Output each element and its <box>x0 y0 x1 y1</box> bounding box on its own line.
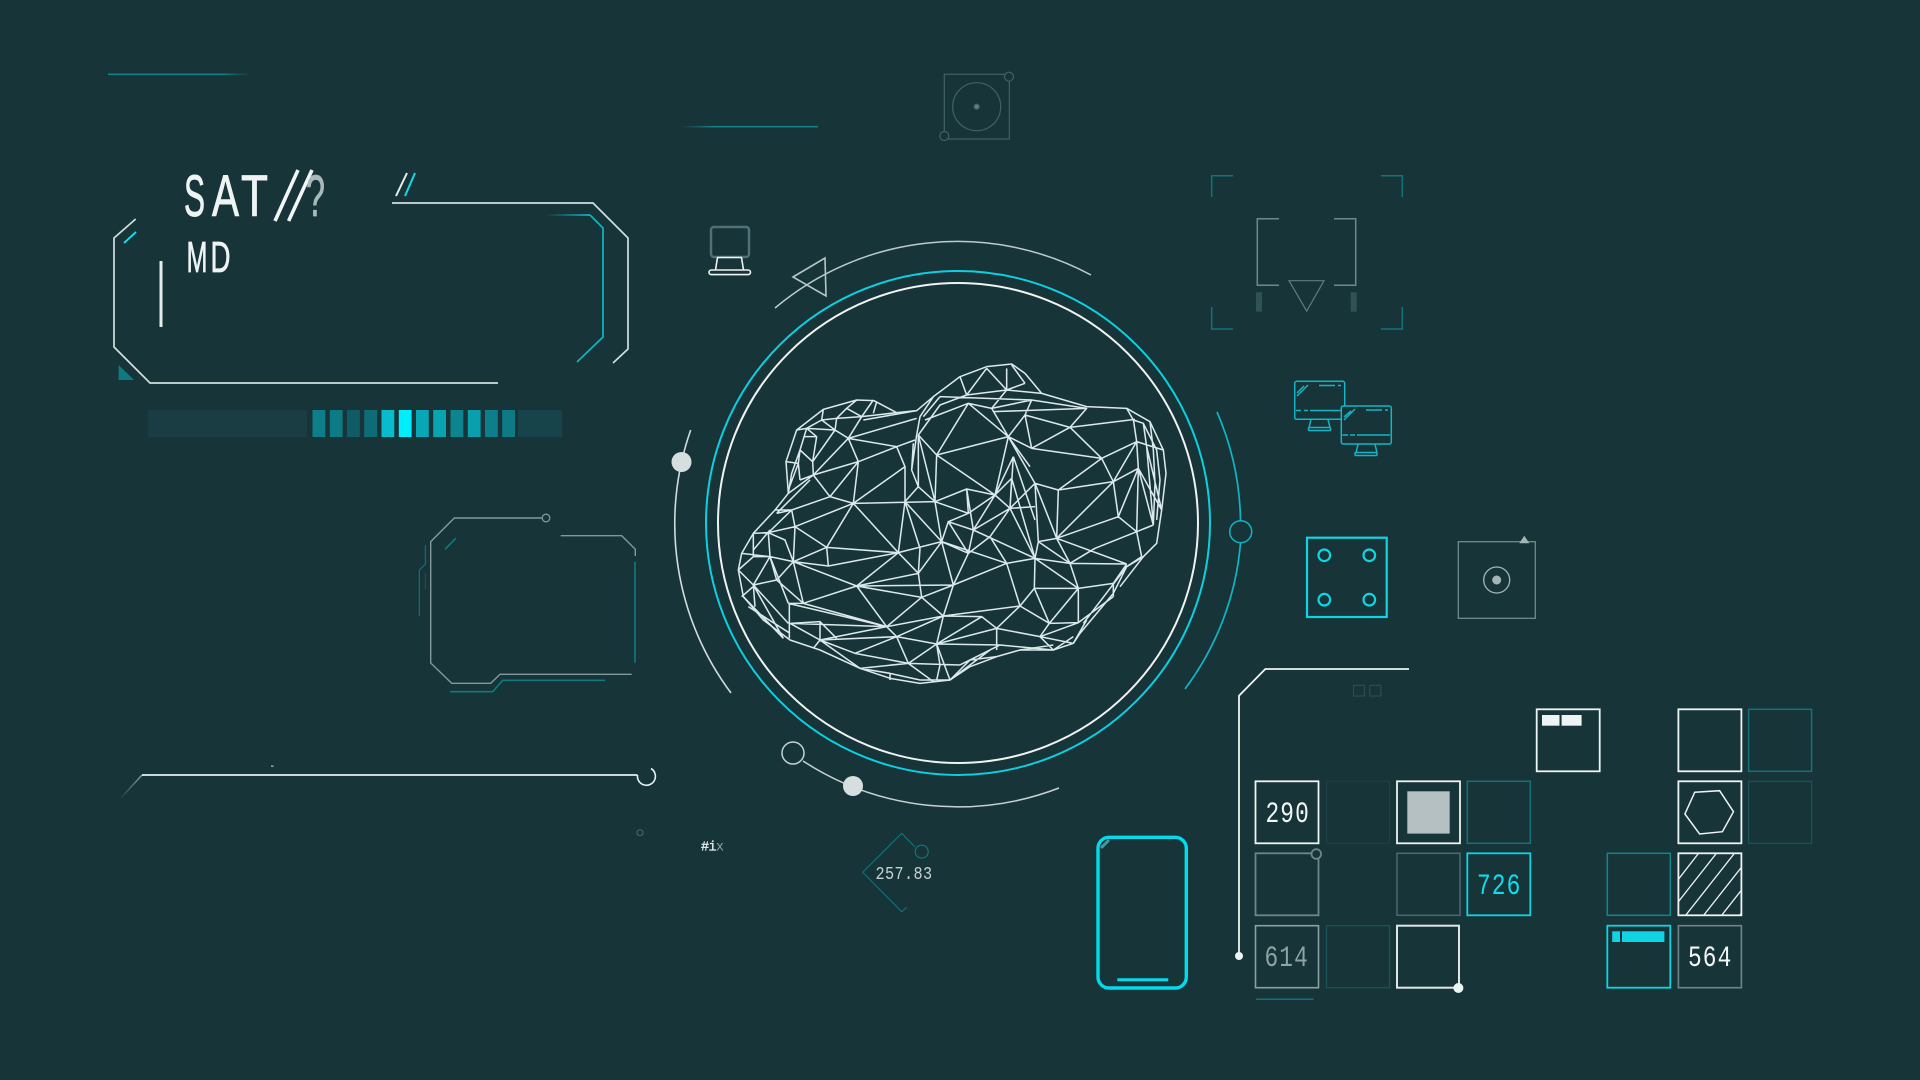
triangle marker <box>793 258 826 296</box>
rock mesh <box>738 365 1163 682</box>
outer arc right <box>1185 412 1240 689</box>
orbit rings <box>672 241 1252 807</box>
left dot <box>672 452 692 472</box>
progress bar <box>148 410 562 437</box>
grey outline with node <box>431 518 632 683</box>
tile 564: 564 <box>1688 941 1732 975</box>
tile 290 <box>1256 781 1318 843</box>
tile 614: 614 <box>1264 941 1309 975</box>
tile hexagon <box>1678 781 1741 843</box>
icon: four dots square <box>1307 538 1387 617</box>
inner brackets <box>1257 219 1356 285</box>
bottom ring node <box>782 742 804 764</box>
icon: phone <box>1098 837 1186 988</box>
subtitle text: M <box>186 234 208 282</box>
white ring <box>718 283 1198 763</box>
tile faint <box>1326 781 1390 843</box>
outer arc bottom <box>803 761 1059 807</box>
outer arc top <box>775 241 1091 308</box>
tile grey <box>1397 853 1460 915</box>
icon: twin monitors <box>1295 381 1391 456</box>
tile 614 <box>1256 926 1318 988</box>
icon: top target square <box>940 72 1014 140</box>
grid of tiles <box>1256 709 1812 999</box>
title text: A <box>212 164 239 229</box>
tile cyan bars <box>1607 926 1670 988</box>
double slash small <box>396 173 415 196</box>
tile 564 <box>1678 926 1741 988</box>
title slashes <box>275 170 312 221</box>
tile 726: 726 <box>1477 869 1521 903</box>
tile with bars <box>1537 709 1600 771</box>
rock outline <box>738 364 1166 683</box>
frame outline right <box>392 203 628 363</box>
title question mark: ? <box>306 164 325 229</box>
cyan tick <box>124 232 136 243</box>
panel: secondary frame <box>419 514 635 692</box>
wireframe rock <box>738 364 1166 683</box>
tile with filled square <box>1397 781 1460 843</box>
bottom dot <box>843 776 863 796</box>
top accent line centre <box>680 126 818 128</box>
vertical bar <box>160 261 162 327</box>
tile dim teal <box>1749 781 1812 843</box>
outer arc left <box>675 430 731 693</box>
cyan ring <box>706 271 1210 775</box>
outer corner brackets <box>1212 176 1402 329</box>
tile 726 <box>1467 853 1530 915</box>
title text <box>184 164 268 229</box>
icon: faint monitor <box>709 227 750 275</box>
tile hatched <box>1678 852 1742 916</box>
tile with dot <box>1397 926 1463 993</box>
corner triangle <box>119 365 134 380</box>
tile 290: 290 <box>1266 797 1310 831</box>
tile top row <box>1678 709 1741 771</box>
down triangle <box>1289 281 1324 311</box>
panel: title frame <box>114 164 628 383</box>
callout: diamond value: 257.83 <box>876 865 933 886</box>
tile teal top <box>1749 709 1812 771</box>
connector line to grid <box>1235 669 1409 960</box>
teal accents <box>419 538 635 692</box>
targeting brackets <box>1212 176 1402 329</box>
right node <box>1230 521 1252 543</box>
subtitle text: D <box>210 234 230 282</box>
tile teal row three <box>1607 853 1670 915</box>
underline <box>1256 998 1314 1000</box>
side ticks <box>1256 292 1262 312</box>
inner cyan edge <box>577 215 603 362</box>
top accent line left <box>108 73 250 75</box>
tile dim row four <box>1326 926 1390 988</box>
bottom-left connector line <box>120 766 655 836</box>
label: ix: #ix <box>701 840 724 856</box>
HUD scene <box>108 72 1812 1000</box>
tile with ring <box>1256 849 1321 915</box>
callout: diamond value <box>863 833 933 912</box>
frame outline left <box>114 219 498 383</box>
icon: target box <box>1458 536 1535 618</box>
title text: S <box>184 164 205 229</box>
tile teal <box>1467 781 1530 843</box>
title text: T <box>241 164 268 229</box>
